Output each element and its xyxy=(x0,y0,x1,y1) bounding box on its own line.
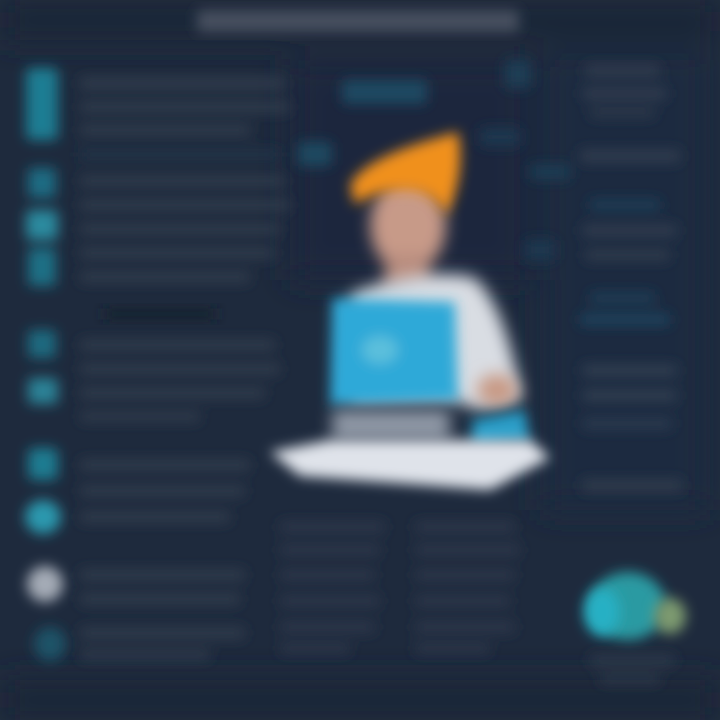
shirt and arm xyxy=(350,274,522,410)
heading: centre top teal xyxy=(298,60,531,166)
text block: left column xyxy=(80,78,290,659)
icon: fourth left xyxy=(28,248,56,286)
illustration: person at laptop xyxy=(270,132,550,490)
icon: cloud bottom right xyxy=(584,572,686,640)
icon: top left tall xyxy=(26,68,58,140)
laptop screen xyxy=(330,298,458,405)
icon: second left xyxy=(28,168,56,198)
caption: cloud xyxy=(590,655,675,683)
desk xyxy=(270,440,550,490)
hand xyxy=(477,374,517,406)
title xyxy=(197,10,519,32)
icon: bottom left xyxy=(34,627,66,661)
heading: left dark band xyxy=(105,308,215,320)
laptop base xyxy=(332,410,450,440)
hair xyxy=(350,132,460,215)
panel: bottom centre text xyxy=(280,522,520,653)
icon: grey circle xyxy=(27,566,63,602)
mouse pad xyxy=(472,410,530,446)
neck and face xyxy=(370,177,446,290)
icon: seventh left xyxy=(28,448,58,480)
icon: fifth left xyxy=(28,330,56,358)
panel: left column icons xyxy=(25,68,66,661)
icon: third left xyxy=(26,210,58,240)
icon: eighth left xyxy=(25,500,61,534)
panel: right column text xyxy=(525,65,682,491)
icon: sixth left xyxy=(28,378,58,404)
